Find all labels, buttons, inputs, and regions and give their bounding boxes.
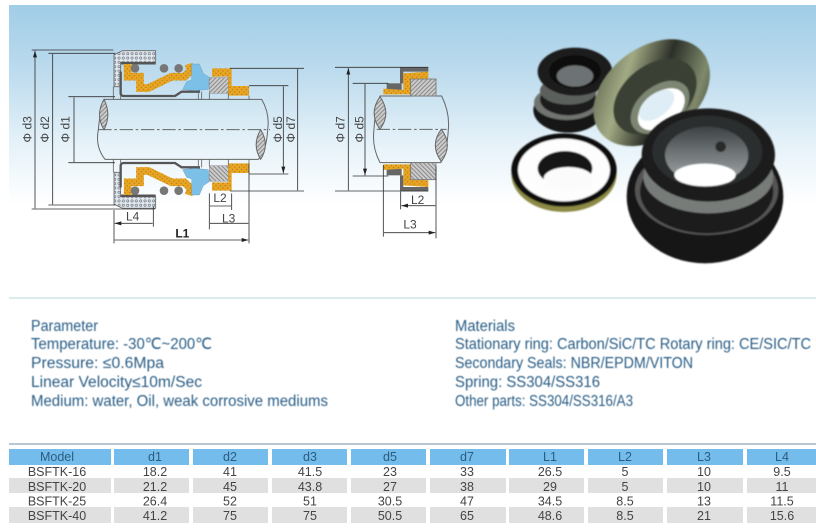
table rows: 23 [383, 465, 397, 479]
table header: d7 [460, 450, 474, 464]
table rows: 38 [460, 480, 474, 494]
lower seat [383, 163, 436, 191]
table rows: 50.5 [378, 509, 402, 523]
dimension labels: L3 [403, 218, 417, 232]
top gradient panel [9, 5, 816, 205]
table rows: BSFTK-16 [28, 465, 86, 479]
table rows: 51 [303, 494, 317, 508]
table header [9, 449, 816, 465]
upper seal half [113, 51, 249, 100]
specification table [9, 443, 816, 523]
table header: Model [40, 450, 74, 464]
table header: d2 [223, 450, 237, 464]
shaft [373, 96, 449, 163]
table rows: 11.5 [770, 494, 794, 508]
dimension labels: Φ d1 [58, 116, 72, 142]
dimension labels: L2 [213, 191, 227, 205]
table rows [9, 465, 816, 523]
table rows: 18.2 [143, 465, 167, 479]
parameter text block: Pressure: ≤0.6Mpa [31, 355, 164, 372]
parameter text block [31, 318, 328, 410]
table rows: BSFTK-40 [28, 509, 86, 523]
parameter text block: Parameter [31, 318, 98, 335]
dimension lines [335, 67, 436, 238]
table header: L1 [543, 450, 557, 464]
table rows: 33 [460, 465, 474, 479]
dimension labels: Φ d5 [271, 116, 285, 142]
back left seal [533, 48, 612, 133]
table rows: 10 [697, 480, 711, 494]
table rows: 41.5 [298, 465, 322, 479]
table rows: 21.2 [143, 480, 167, 494]
table header: d5 [383, 450, 397, 464]
table rows: 41 [223, 465, 237, 479]
parameter text block: Linear Velocity≤10m/Sec [31, 374, 202, 391]
table rows: 30.5 [378, 494, 402, 508]
dimension lines [32, 50, 304, 243]
product photo: four seal parts [511, 17, 783, 263]
table rows: 45 [223, 480, 237, 494]
upper seat [383, 67, 436, 96]
table rows: 9.5 [773, 465, 791, 479]
table rows: 15.6 [770, 509, 794, 523]
materials text block: Other parts: SS304/SS316/A3 [455, 393, 633, 410]
table rows: 27 [383, 480, 397, 494]
table header: d1 [148, 450, 162, 464]
dimension labels: Φ d7 [284, 116, 298, 142]
materials text block: Materials [455, 318, 515, 335]
dimension labels: Φ d3 [20, 116, 34, 142]
table rows: 5 [622, 480, 629, 494]
metal cup ring [573, 17, 731, 168]
dimension labels: Φ d7 [333, 116, 347, 142]
table rows: 75 [303, 509, 317, 523]
dimension labels: L1 [175, 226, 190, 240]
table rows: 48.6 [538, 509, 562, 523]
table header: d3 [303, 450, 317, 464]
diagram: stationary seat cross-section [333, 67, 449, 238]
table rows: 21 [697, 509, 711, 523]
table rows: 13 [697, 494, 711, 508]
parameter text block: Medium: water, Oil, weak corrosive mediums [31, 393, 328, 410]
dimension labels: L4 [126, 210, 140, 224]
parameter text block: Temperature: -30℃~200℃ [31, 336, 212, 353]
shaft [97, 99, 270, 159]
table rows: 34.5 [538, 494, 562, 508]
dimension labels [20, 116, 298, 240]
table rows: BSFTK-20 [28, 480, 86, 494]
table rows: 47 [460, 494, 474, 508]
materials text block: Spring: SS304/SS316 [455, 374, 600, 391]
table rows: 5 [622, 465, 629, 479]
dimension labels: Φ d2 [38, 116, 52, 142]
dimension labels: L3 [222, 212, 236, 226]
materials text block [455, 318, 811, 410]
table rows: 11 [776, 480, 789, 494]
table rows: 26.5 [538, 465, 562, 479]
table rows: 65 [460, 509, 474, 523]
dimension labels: Φ d5 [352, 116, 366, 142]
table rows: 26.4 [143, 494, 167, 508]
table rows: 75 [223, 509, 237, 523]
white face ring [511, 133, 617, 212]
table rows: 8.5 [616, 509, 634, 523]
lower seal half [113, 159, 249, 208]
table rows: 41.2 [143, 509, 167, 523]
table rows: 52 [223, 494, 237, 508]
materials text block: Secondary Seals: NBR/EPDM/VITON [455, 355, 693, 372]
table rows: BSFTK-25 [28, 494, 86, 508]
dimension labels [333, 116, 425, 232]
large front seal [627, 108, 783, 263]
dimension labels: L2 [411, 193, 425, 207]
table rows: 8.5 [616, 494, 634, 508]
table header: L4 [775, 450, 789, 464]
divider [9, 297, 816, 299]
table header: L2 [618, 450, 632, 464]
table rows: 43.8 [298, 480, 322, 494]
table header: L3 [697, 450, 711, 464]
table rows: 10 [697, 465, 711, 479]
diagram: full seal cross-section [20, 50, 304, 243]
table rows: 29 [543, 480, 557, 494]
